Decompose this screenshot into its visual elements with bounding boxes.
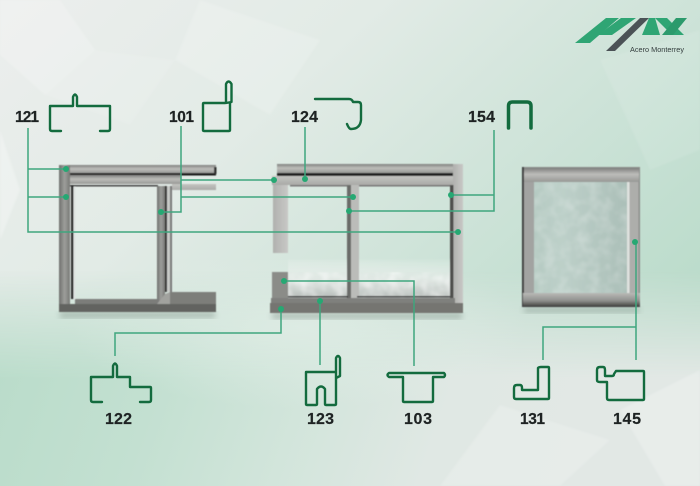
leaders for 121 bbox=[28, 128, 461, 235]
profile 123 bbox=[306, 356, 340, 405]
number labels bbox=[15, 109, 641, 428]
profile 121 bbox=[50, 94, 110, 131]
label 103: 103 bbox=[404, 411, 432, 428]
leader for 123 bbox=[317, 298, 323, 365]
label 154: 154 bbox=[468, 109, 495, 126]
logo: MAX Acero Monterrey bbox=[575, 18, 687, 54]
profiles bbox=[50, 82, 644, 405]
label 124: 124 bbox=[291, 109, 318, 126]
leader for 103 bbox=[281, 278, 414, 366]
label 131: 131 bbox=[520, 411, 545, 428]
label 123: 123 bbox=[307, 411, 334, 428]
label 145: 145 bbox=[613, 411, 641, 428]
window: centre frame bbox=[270, 164, 463, 313]
label 121: 121 bbox=[15, 109, 39, 126]
label 122: 122 bbox=[105, 411, 132, 428]
leaders for 131 and 145 bbox=[543, 239, 638, 360]
leader for 122 bbox=[115, 306, 284, 356]
profile 101 bbox=[203, 82, 232, 131]
leaders for 154 bbox=[346, 130, 494, 214]
window: left frame bbox=[59, 165, 216, 312]
profile 145 bbox=[597, 367, 644, 400]
logo: MAX Acero Monterrey: Acero Monterrey bbox=[630, 45, 684, 54]
leader for 124 bbox=[302, 127, 308, 182]
profile 131 bbox=[514, 367, 549, 399]
leader lines and dots bbox=[28, 126, 638, 366]
label 101: 101 bbox=[169, 109, 194, 126]
window: right frame bbox=[522, 167, 640, 307]
profile 124 bbox=[315, 99, 361, 129]
profile 154 bbox=[508, 102, 531, 128]
profile 122 bbox=[91, 364, 151, 402]
leaders for 101 bbox=[158, 126, 356, 215]
profile 103 bbox=[388, 373, 445, 402]
